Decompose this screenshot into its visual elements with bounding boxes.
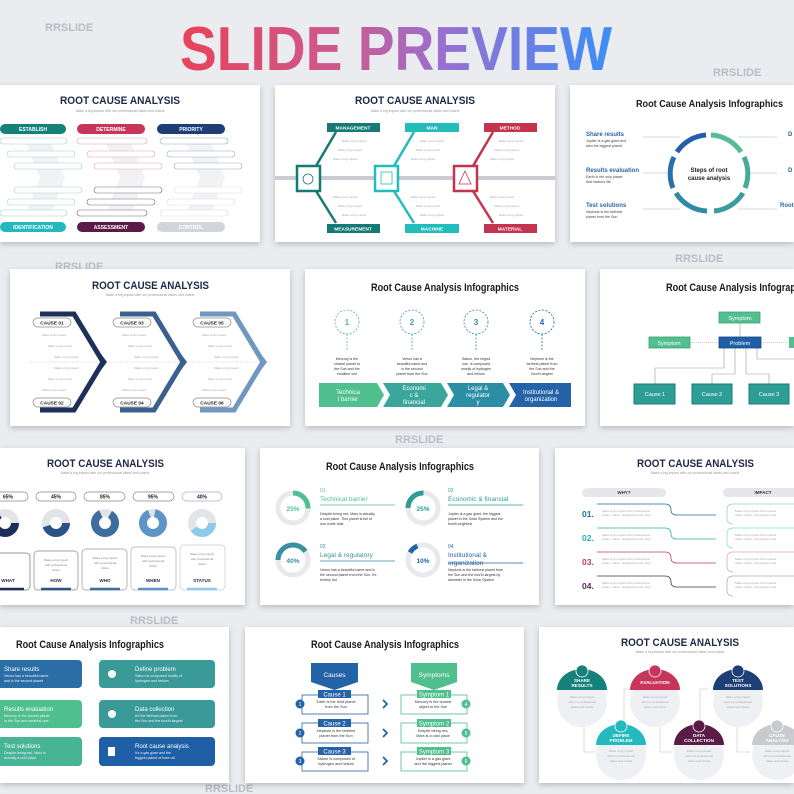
slide 3: steps ring: Results evaluation — [586, 168, 639, 174]
slide 2: fishbone: · Make a big impact — [418, 139, 444, 143]
slide 9: why / impact: slides, charts, infographics and — [735, 561, 777, 565]
slide 11: causes and symptoms: and the biggest planet — [414, 762, 453, 766]
slide 12: six arches: with our professional — [685, 754, 713, 758]
slide 2: fishbone: · Make a big impact — [336, 204, 362, 208]
slide 4: chevron causes: Make a big impact — [214, 366, 239, 370]
slide 8: four barrier donuts: 10% — [416, 558, 430, 565]
slide 8: four barrier donuts: Legal & regulatory — [320, 552, 374, 559]
slide 12: six arches: RESULTS — [571, 683, 593, 688]
slide 8: four barrier donuts: 25% — [416, 506, 430, 513]
slide 2: fishbone: ROOT CAUSE ANALYSIS — [355, 95, 475, 107]
slide 5: four barriers: is the second — [401, 367, 423, 371]
slide 10: six cards: Root cause analysis — [135, 744, 189, 750]
slide 1: establish/determine/priority — [0, 85, 260, 242]
slide 8: four barrier donuts: diameter in the Solar System — [448, 578, 494, 582]
slide 3: steps ring: Test solutions — [586, 203, 627, 209]
slide 9: why / impact: Make a big impact with professional — [602, 533, 650, 537]
slide 3: steps ring: Neptune is the farthest — [586, 210, 622, 214]
slide 9: why / impact: Make a big impact with profess — [735, 581, 777, 585]
slide 7: donut percentages: with professional — [191, 557, 213, 561]
slide 4: chevron causes: Make a big impact — [42, 333, 67, 337]
slide 5: four barriers: 2 — [410, 318, 415, 327]
slide 2: fishbone: · Make a big impact — [497, 213, 523, 217]
slide 10: six cards: biggest planet of them all — [135, 756, 175, 760]
slide 4: chevron causes: CAUSE 05 — [200, 320, 224, 326]
slide 12: six arches: TEST — [732, 678, 744, 683]
slide 11: causes and symptoms: from the Sun — [325, 705, 347, 709]
slide 6: problem tree: Cause 2 — [702, 392, 722, 398]
slide 4: chevron causes: Make a big impact — [128, 344, 153, 348]
slide 11: causes and symptoms: Root Cause Analysis Infographics — [311, 639, 459, 651]
slide 7: donut percentages: slides — [52, 568, 60, 572]
slide 1: establish/determine/priority: CONTROL — [179, 225, 203, 231]
slide 9: why / impact: IMPACT — [755, 490, 772, 495]
slide 7: donut percentages: 85% — [100, 494, 111, 500]
slide 3: steps ring — [570, 85, 794, 242]
slide 12: six arches: slides and charts — [571, 705, 594, 709]
slide 8: four barrier donuts: Venus has a beautiful name and is — [320, 568, 375, 572]
slide 9: why / impact: slides, charts, infographics and — [735, 537, 777, 541]
slide 2: fishbone: MACHINE — [421, 226, 444, 232]
slide 7: donut percentages: WHAT — [1, 578, 15, 583]
slide 2: fishbone: MEASUREMENT — [334, 226, 372, 232]
slide 7: donut percentages: Make a big impact — [141, 554, 165, 558]
slide 4: chevron causes: Make a big impact — [42, 388, 67, 392]
slide 10: six cards: and is the second planet — [4, 679, 43, 683]
slide 10: six cards: to the Sun and smallest one — [4, 719, 49, 723]
slide 10: six cards: Data collection — [135, 707, 174, 713]
slide 10: six cards: actually a cold place — [4, 756, 36, 760]
slide 11: causes and symptoms: Mars is a cold place — [416, 734, 450, 738]
slide 11: causes and symptoms: Saturn is composed of — [317, 757, 356, 761]
slide 7: donut percentages: Make a big impact — [44, 558, 68, 562]
slide 1: establish/determine/priority: IDENTIFICATION — [13, 225, 53, 231]
slide 3: steps ring: planet from the Sun — [586, 215, 617, 219]
slide 11: causes and symptoms: Despite being red, — [418, 729, 448, 733]
slide 2: fishbone: · Make a big impact — [493, 148, 519, 152]
slide 12: six arches: slides and charts — [610, 759, 633, 763]
slide 2: fishbone — [275, 85, 555, 242]
slide 8: four barrier donuts: Institutional & — [448, 552, 488, 559]
slide 10: six cards — [0, 627, 229, 783]
slide 12: six arches: CAUSE — [769, 733, 785, 738]
slide 2: fishbone: MAN — [427, 126, 438, 132]
slide 3: steps ring: also the biggest planet — [586, 144, 622, 148]
slide 8: four barrier donuts: Economic & financial — [448, 496, 509, 503]
watermarks: RRSLIDE — [713, 67, 761, 79]
slide 12: six arches: COLLECTION — [684, 738, 715, 743]
slide 7: donut percentages: Make a big impact with our professional slides and charts — [61, 471, 150, 475]
slide 11: causes and symptoms: 4 — [465, 702, 468, 708]
slide 1: establish/determine/priority: ROOT CAUSE ANALYSIS — [60, 95, 180, 107]
slide 2: fishbone: · Make a big impact — [493, 204, 519, 208]
slide 3: steps ring: D — [788, 168, 793, 174]
slide 11: causes and symptoms: object to the Sun — [419, 705, 447, 709]
slide 12: six arches: Make a big impact — [570, 695, 594, 699]
slide 7: donut percentages: Make a big impact — [190, 552, 214, 556]
slide 7: donut percentages: ROOT CAUSE ANALYSIS — [47, 458, 164, 470]
slide 5: four barriers: y — [476, 400, 480, 406]
slide 10: six cards: Venus has a beautiful name — [4, 674, 48, 678]
slide 8: four barrier donuts: 04 — [448, 544, 454, 550]
slide 8: four barrier donuts: Neptune is the farthest planet from — [448, 568, 503, 572]
slide 2: fishbone: MANAGEMENT — [336, 126, 371, 132]
slide 4: chevron causes: Make a big impact — [208, 344, 233, 348]
slide 11: causes and symptoms — [245, 627, 524, 783]
slide 11: causes and symptoms: Jupiter is a gas giant — [416, 757, 451, 761]
slide 3: steps ring: Earth is the only planet — [586, 175, 623, 179]
slide 5: four barriers: Mercury is the — [336, 357, 358, 361]
slide 10: six cards: Test solutions — [4, 744, 40, 750]
slide 12: six arches — [539, 627, 794, 783]
slide 9: why / impact: slides, charts, infographics and more — [602, 561, 651, 565]
slide 2: fishbone: · Make a big impact — [488, 157, 514, 161]
slide 6: problem tree: Symptom — [728, 316, 752, 322]
slide 5: four barriers: smallest one — [337, 372, 357, 376]
slide 9: why / impact: Make a big impact with our professional slides and charts — [651, 471, 740, 475]
slide 11: causes and symptoms: Mercury is the closest — [415, 700, 452, 704]
watermarks: RRSLIDE — [55, 261, 103, 273]
slide 9: why / impact: slides, charts, infographics and — [735, 585, 777, 589]
watermarks: RRSLIDE — [675, 253, 723, 265]
slide 12: six arches: Make a big impact — [726, 695, 750, 699]
slide 11: causes and symptoms: 5 — [465, 731, 468, 737]
slide 8: four barrier donuts: 02 — [448, 488, 454, 494]
slide 8: four barrier donuts: 01 — [320, 488, 326, 494]
slide 8: four barrier donuts: Root Cause Analysis Infographics — [326, 461, 474, 473]
slide 12: six arches: PROBLEM — [610, 738, 633, 743]
slide 7: donut percentages: with professional — [45, 563, 67, 567]
slide 9: why / impact: 04. — [582, 581, 594, 591]
slide 1: establish/determine/priority: ASSESSMENT — [94, 225, 128, 231]
slide 5: four barriers: Legal & — [468, 386, 488, 392]
slide 7: donut percentages: slides — [149, 564, 157, 568]
slide 9: why / impact: slides, charts, infographics and more — [602, 513, 651, 517]
slide 9: why / impact: 01. — [582, 509, 594, 519]
slide 2: fishbone: · Make a big impact — [331, 157, 357, 161]
slide 2: fishbone: · Make a big impact — [488, 195, 514, 199]
slide 7: donut percentages: 65% — [3, 494, 14, 500]
slide 8: four barrier donuts: Despite being red, Mars is actually — [320, 512, 375, 516]
slide 12: six arches: Make a big impact — [643, 695, 667, 699]
slide 12: six arches: DATA — [693, 733, 706, 738]
slide 11: causes and symptoms: Symptoms — [419, 672, 450, 679]
slide 10: six cards: Saturn is composed mostly of — [135, 674, 182, 678]
slide 2: fishbone: · Make a big impact — [414, 148, 440, 152]
slide 4: chevron causes: Make a big impact — [214, 355, 239, 359]
slide 8: four barrier donuts: the Sun and the fourth-largest by — [448, 573, 501, 577]
slide 9: why / impact: Make a big impact with profess — [735, 557, 777, 561]
slide 9: why / impact — [555, 448, 794, 605]
slide 4: chevron causes — [10, 269, 290, 426]
slide 4: chevron causes: Make a big impact — [202, 388, 227, 392]
slide 2: fishbone: · Make a big impact — [414, 204, 440, 208]
slide 5: four barriers: 3 — [474, 318, 479, 327]
slide 5: four barriers: 4 — [540, 318, 545, 327]
slide 12: six arches: ANALYSIS — [766, 738, 788, 743]
slide 5: four barriers: l barrier — [338, 397, 358, 403]
slide 3: steps ring: Jupiter is a gas giant and — [586, 139, 626, 143]
slide 8: four barrier donuts: 03 — [320, 544, 326, 550]
slide 10: six cards: the Sun and the fourth-largest — [135, 719, 183, 723]
slide 8: four barrier donuts: terribly hot — [320, 578, 337, 582]
slide 9: why / impact: ROOT CAUSE ANALYSIS — [637, 458, 754, 470]
slide 2: fishbone: · Make a big impact — [409, 157, 435, 161]
slide 4: chevron causes: ROOT CAUSE ANALYSIS — [92, 280, 209, 292]
slide 11: causes and symptoms: Neptune is the farthest — [317, 729, 356, 733]
slide 4: chevron causes: Make a big impact — [54, 355, 79, 359]
slide 5: four barriers: farthest planet from — [527, 362, 557, 366]
slide 11: causes and symptoms: Cause 1 — [323, 692, 346, 698]
slide 2: fishbone: · Make a big impact — [340, 213, 366, 217]
slide 5: four barriers: planet from the Sun — [396, 372, 428, 376]
slide 11: causes and symptoms: hydrogen and helium — [318, 762, 354, 766]
slide 7: donut percentages: 95% — [148, 494, 159, 500]
slide 4: chevron causes: Make a big impact — [48, 344, 73, 348]
slide 11: causes and symptoms: Cause 2 — [323, 722, 346, 728]
slide 8: four barrier donuts: 25% — [286, 506, 300, 513]
slide 10: six cards: It's a gas giant and the — [135, 751, 171, 755]
slide 12: six arches: slides and charts — [688, 759, 711, 763]
slide 10: six cards: Define problem — [135, 667, 176, 673]
slide 12: six arches: with our professional — [763, 754, 791, 758]
slide 6: problem tree: Cause 1 — [645, 392, 665, 398]
slide 5: four barriers: c & — [410, 393, 418, 399]
slide 9: why / impact: slides, charts, infographics and more — [602, 585, 651, 589]
slide 10: six cards: It's the farthest planet from — [135, 714, 177, 718]
slide 3: steps ring: Share results — [586, 132, 625, 138]
slide 2: fishbone: · Make a big impact — [409, 195, 435, 199]
slide 12: six arches: ROOT CAUSE ANALYSIS — [621, 637, 739, 649]
slide 12: six arches: Make a big impact with our professional slides and charts — [636, 650, 725, 654]
slide 4: chevron causes: CAUSE 04 — [120, 400, 144, 406]
slide 2: fishbone: · Make a big impact — [340, 139, 366, 143]
slide 8: four barrier donuts: iron oxide dust — [320, 522, 343, 526]
slide 6: problem tree: Cause 3 — [759, 392, 779, 398]
slide 4: chevron causes: CAUSE 06 — [200, 400, 224, 406]
slide 11: causes and symptoms: 6 — [465, 759, 468, 765]
slide 1: establish/determine/priority: Make a big impact with our professional slides and charts — [76, 109, 165, 113]
slide 5: four barriers: mostly of hydrogen — [461, 367, 491, 371]
slide 7: donut percentages: WHEN — [146, 578, 161, 583]
slide 8: four barrier donuts: fourth-brightest — [448, 522, 472, 526]
slide 8: four barrier donuts: a cold place. This planet is full of — [320, 517, 372, 521]
slide 5: four barriers: 1 — [345, 318, 350, 327]
slide 8: four barrier donuts: the second planet from the Sun. It's — [320, 573, 377, 577]
slide 2: fishbone: · Make a big impact — [497, 139, 523, 143]
slide 3: steps ring: that harbors life — [586, 180, 611, 184]
slide 8: four barrier donuts: Jupiter is a gas giant, the biggest — [448, 512, 501, 516]
slide 12: six arches: slides and charts — [766, 759, 789, 763]
slide 5: four barriers: Institutional & — [523, 390, 559, 396]
slide 4: chevron causes: CAUSE 01 — [40, 320, 64, 326]
slide 10: six cards: Results evaluation — [4, 707, 53, 713]
slide 8: four barrier donuts: 40% — [286, 558, 300, 565]
watermarks: RRSLIDE — [45, 22, 93, 34]
slide 9: why / impact: Make a big impact with profess — [735, 509, 777, 513]
slide 4: chevron causes: CAUSE 02 — [40, 400, 64, 406]
slide 5: four barriers: beautiful name and — [397, 362, 427, 366]
slide 5: four barriers: closest planet to — [334, 362, 360, 366]
slide 7: donut percentages: Make a big impact — [93, 556, 117, 560]
slide 2: fishbone: · Make a big impact — [418, 213, 444, 217]
slide 7: donut percentages: HOW — [50, 578, 62, 583]
slide 3: steps ring: cause analysis — [688, 176, 731, 182]
slide 9: why / impact: slides, charts, infographics and — [735, 513, 777, 517]
slide 11: causes and symptoms: Symptom 2 — [419, 722, 450, 728]
slide 1: establish/determine/priority: DETERMINE — [96, 127, 126, 133]
slide 2: fishbone: · Make a big impact — [331, 195, 357, 199]
slide 5: four barriers: and helium — [467, 372, 485, 376]
slide 12: six arches: Make a big impact — [765, 749, 789, 753]
slide 4: chevron causes: Make a big impact — [208, 377, 233, 381]
slide 3: steps ring: Steps of root — [690, 168, 728, 174]
slide 3: steps ring: D — [788, 132, 793, 138]
slide 12: six arches: with our professional — [568, 700, 596, 704]
slide 8: four barrier donuts: planet in the Solar System and the — [448, 517, 503, 521]
slide 11: causes and symptoms: Cause 3 — [323, 750, 346, 756]
slide 7: donut percentages: with professional — [94, 561, 116, 565]
slide 7: donut percentages: 40% — [197, 494, 208, 500]
slide 11: causes and symptoms: 2 — [299, 731, 302, 737]
slide 5: four barriers: Neptune is the — [530, 357, 554, 361]
slide 7: donut percentages: STATUS — [193, 578, 211, 583]
title: SLIDE PREVIEW — [180, 15, 612, 84]
slide 11: causes and symptoms: planet from the Sun — [319, 734, 353, 738]
slide 4: chevron causes: Make a big impact — [202, 333, 227, 337]
slide 5: four barriers: organization — [525, 397, 557, 403]
slide 12: six arches: with our professional — [724, 700, 752, 704]
slide 10: six cards: Despite being red, Mars is — [4, 751, 46, 755]
slide 12: six arches: SOLUTIONS — [725, 683, 751, 688]
slide 9: why / impact: WHY? — [617, 490, 631, 495]
slide 4: chevron causes: CAUSE 03 — [120, 320, 144, 326]
slide 10: six cards: hydrogen and helium — [135, 679, 169, 683]
slide 7: donut percentages: slides — [198, 562, 206, 566]
slide 5: four barriers: regulator — [466, 393, 490, 399]
slide 7: donut percentages: slides — [101, 566, 109, 570]
slide 7: donut percentages: WHO — [99, 578, 111, 583]
slide 9: why / impact: 03. — [582, 557, 594, 567]
slide 8: four barrier donuts — [260, 448, 539, 605]
slide 11: causes and symptoms: Symptom 3 — [419, 750, 450, 756]
slide 7: donut percentages — [0, 448, 245, 605]
slide 4: chevron causes: Make a big impact — [128, 377, 153, 381]
slide 6: problem tree: Symptom — [657, 341, 681, 347]
slide 12: six arches: DEFINE — [613, 733, 629, 738]
slide 6: problem tree: Problem — [730, 341, 751, 347]
slide 2: fishbone: · Make a big impact — [336, 148, 362, 152]
watermarks: RRSLIDE — [130, 615, 178, 627]
slide 5: four barriers: financial — [403, 400, 425, 406]
slide 4: chevron causes: Make a big impact with our professional slides and charts — [106, 293, 195, 297]
slide 5: four barriers: Economi — [402, 386, 426, 392]
slide 11: causes and symptoms: 3 — [299, 759, 302, 765]
slide 10: six cards: Root Cause Analysis Infographics — [16, 639, 164, 651]
slide 4: chevron causes: Make a big impact — [54, 366, 79, 370]
slide 12: six arches: with our professional — [641, 700, 669, 704]
slide 7: donut percentages: with professional — [142, 559, 164, 563]
slide 5: four barriers: Technica — [336, 390, 360, 396]
slide 12: six arches: EVALUATION — [640, 680, 670, 685]
slide 12: six arches: slides and charts — [727, 705, 750, 709]
slide 4: chevron causes: Make a big impact — [48, 377, 73, 381]
slide 10: six cards: Share results — [4, 667, 39, 673]
slide 12: six arches: SHARE — [574, 678, 590, 683]
slide 5: four barriers: fourth-largest — [531, 372, 553, 376]
slide 5: four barriers: one, is composed — [462, 362, 490, 366]
slide 11: causes and symptoms: Earth is the third planet — [316, 700, 356, 704]
slide 9: why / impact: Make a big impact with profess — [735, 533, 777, 537]
slide 4: chevron causes: Make a big impact — [122, 333, 147, 337]
slide 9: why / impact: Make a big impact with professional — [602, 509, 650, 513]
slide 7: donut percentages: 45% — [51, 494, 62, 500]
slide 4: chevron causes: Make a big impact — [134, 366, 159, 370]
slide 11: causes and symptoms: 1 — [299, 702, 302, 708]
slide 5: four barriers: Root Cause Analysis Infographics — [371, 282, 519, 294]
slide 4: chevron causes: Make a big impact — [122, 388, 147, 392]
slide 11: causes and symptoms: Symptom 1 — [419, 692, 450, 698]
slide 9: why / impact: Make a big impact with professional — [602, 557, 650, 561]
slide 12: six arches: with our professional — [607, 754, 635, 758]
slide 5: four barriers: Venus has a — [402, 357, 422, 361]
slide 5: four barriers: Saturn, the ringed — [462, 357, 490, 361]
slide 8: four barrier donuts: organization — [448, 560, 484, 567]
slide 1: establish/determine/priority: PRIORITY — [179, 127, 203, 133]
slide 1: establish/determine/priority: ESTABLISH — [19, 127, 47, 133]
slide 11: causes and symptoms: Causes — [323, 672, 346, 679]
slide 9: why / impact: 02. — [582, 533, 594, 543]
slide 5: four barriers: the Sun and the — [334, 367, 360, 371]
slide 6: problem tree — [600, 269, 794, 426]
slide 5: four barriers: the Sun and the — [529, 367, 555, 371]
slide 12: six arches: Make a big impact — [687, 749, 711, 753]
slide 12: six arches: slides and charts — [644, 705, 667, 709]
slide 12: six arches: Make a big impact — [609, 749, 633, 753]
watermarks: RRSLIDE — [395, 434, 443, 446]
slide 5: four barriers — [305, 269, 585, 426]
slide 2: fishbone: METHOD — [500, 126, 521, 132]
slide 4: chevron causes: Make a big impact — [134, 355, 159, 359]
slide 8: four barrier donuts: Technical barrier — [320, 496, 369, 503]
slide 2: fishbone: Make a big impact with our professional slides and charts — [371, 109, 460, 113]
slide 2: fishbone: MATERIAL — [498, 226, 522, 232]
slide 10: six cards: Mercury is the closest planet — [4, 714, 50, 718]
slide 9: why / impact: Make a big impact with professional — [602, 581, 650, 585]
slide 9: why / impact: slides, charts, infographics and more — [602, 537, 651, 541]
